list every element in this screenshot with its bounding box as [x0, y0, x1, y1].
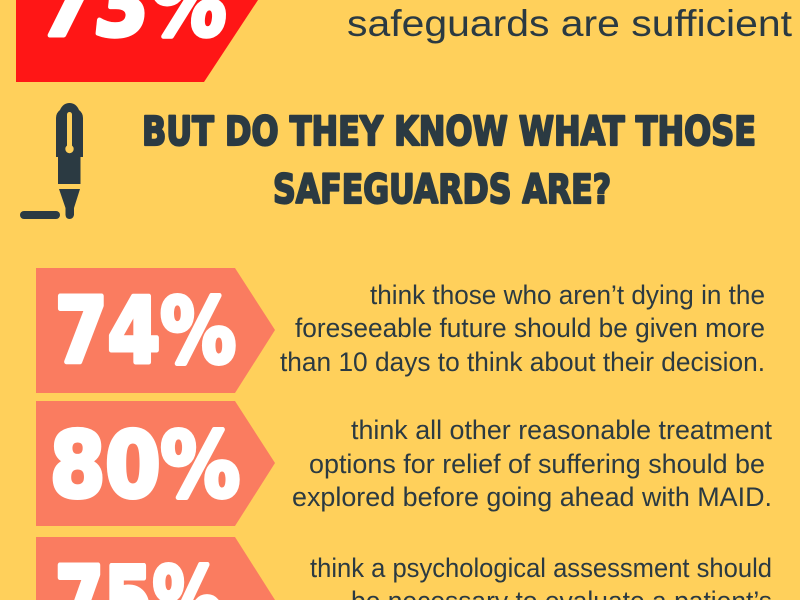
panel: 73% red banner — [16, 0, 258, 82]
text: 74% description: think those who aren’t dying in the — [370, 280, 765, 310]
text: 75% description: think a psychological assessment should — [310, 553, 772, 583]
text: 80% description: explored before going ahead with MAID. — [292, 482, 772, 512]
text: 80% description: options for relief of suffering should be — [309, 449, 765, 479]
stat: 74%: 74% — [55, 279, 236, 384]
text: 80% description: think all other reasonable treatment — [351, 415, 772, 445]
text: 74% description: foreseeable future should be given more — [295, 313, 765, 343]
stat: 80%: 80% — [50, 413, 240, 518]
heading: but do they know what those safeguards are: SAFEGUARDS ARE? — [273, 167, 611, 213]
icon: fountain pen — [20, 103, 83, 219]
heading: but do they know what those safeguards are — [142, 109, 756, 213]
panel: 80% stat row — [36, 401, 772, 526]
text: 80% description — [292, 415, 772, 512]
text: 75% description — [310, 553, 772, 600]
text: 74% description: than 10 days to think about their decision. — [280, 347, 765, 377]
text: safeguards are sufficient: safeguards are sufficient — [347, 3, 793, 44]
panel: 74% stat row — [36, 268, 765, 393]
text: 74% description — [280, 280, 765, 377]
panel: 75% stat row — [36, 537, 772, 600]
